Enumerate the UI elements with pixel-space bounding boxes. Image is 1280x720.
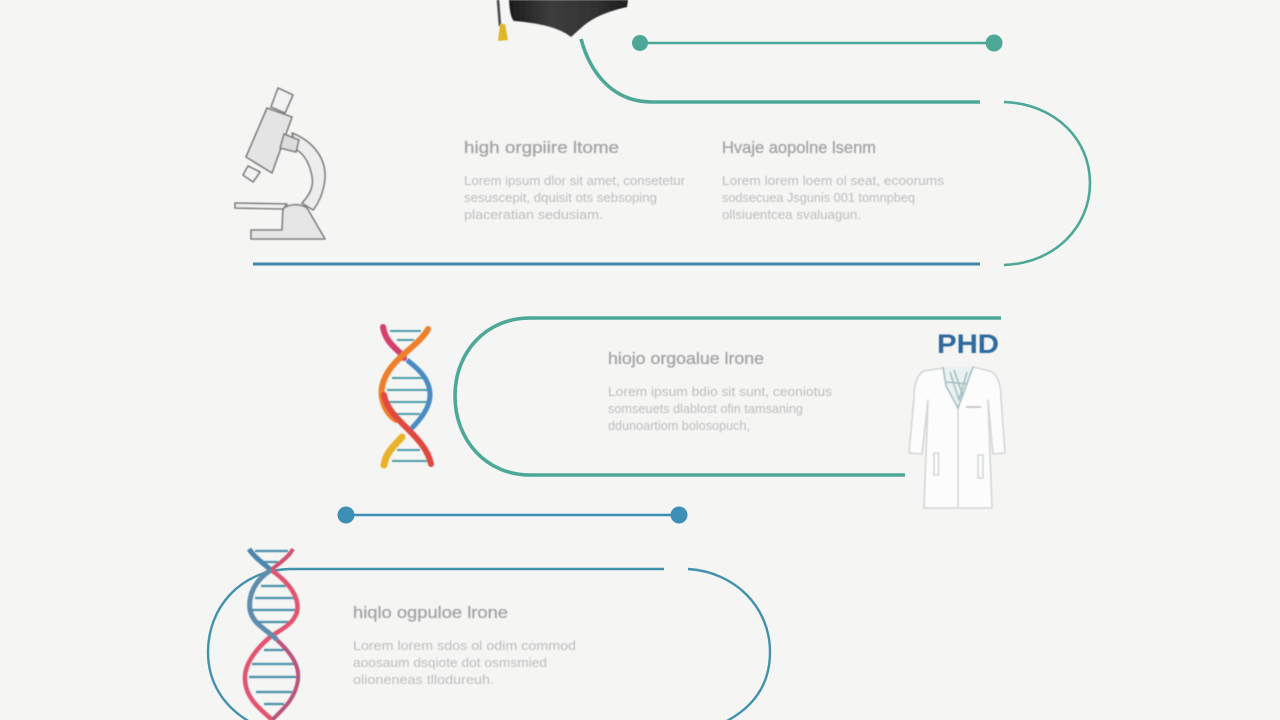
- body: item three: Lorem ipsum bdio sit sunt, ceoniotus: [608, 384, 833, 399]
- teal path: middle loop: [455, 318, 1001, 475]
- icon: microscope: [235, 88, 325, 239]
- icon: DNA helix multicolour: [382, 327, 431, 465]
- body: item two: [722, 173, 945, 222]
- icon: graduation cap: [498, 0, 628, 41]
- text block: item one: [464, 139, 686, 222]
- blue path: bottom loop right: [688, 569, 770, 720]
- blue path: bottom loop left: [208, 569, 664, 720]
- text block: item four: [353, 604, 576, 687]
- body: item three: [608, 384, 833, 433]
- body: item one: [464, 173, 686, 222]
- text block: item three: [608, 350, 833, 433]
- body: item four: [353, 638, 576, 687]
- body: item two: ollsiuentcea svaluagun.: [722, 207, 861, 222]
- body: item one: placeratian sedusiam.: [464, 207, 603, 222]
- body: item two: sodsecuea Jsgunis 001 tomnpbeq: [722, 190, 915, 205]
- teal path: curve under cap: [581, 39, 980, 102]
- body: item four: aoosaum dsqiote dot osmsmied: [353, 655, 547, 670]
- body: item three: ddunoartiom bolosopuch,: [608, 418, 750, 433]
- icon: DNA helix red and blue: [245, 549, 298, 720]
- body: item one: sesuscepit, dquisit ots sebsoping: [464, 190, 657, 205]
- heading: item four: hiqlo ogpuloe lrone: [353, 604, 508, 622]
- body: item four: Lorem lorem sdos ol odim commod: [353, 638, 576, 653]
- blue divider line: [253, 262, 980, 266]
- heading: item three: hiojo orgoalue lrone: [608, 350, 764, 368]
- body: item one: Lorem ipsum dlor sit amet, consetetur: [464, 173, 686, 188]
- teal connector: top dumbbell: [632, 34, 1002, 52]
- blue connector: dumbbell: [338, 506, 688, 524]
- icon: lab coat: [909, 367, 1005, 508]
- body: item two: Lorem lorem loem ol seat, ecoorums: [722, 173, 945, 188]
- body: item four: olioneneas tllodureuh.: [353, 672, 494, 687]
- teal path: right arc: [1004, 102, 1090, 265]
- label: PHD: PHD: [937, 329, 999, 359]
- text block: item two: [722, 139, 945, 222]
- heading: item one: high orgpiire ltome: [464, 139, 619, 157]
- heading: item two: Hvaje aopolne lsenm: [722, 139, 876, 157]
- body: item three: somseuets dlablost ofin tamsaning: [608, 401, 803, 416]
